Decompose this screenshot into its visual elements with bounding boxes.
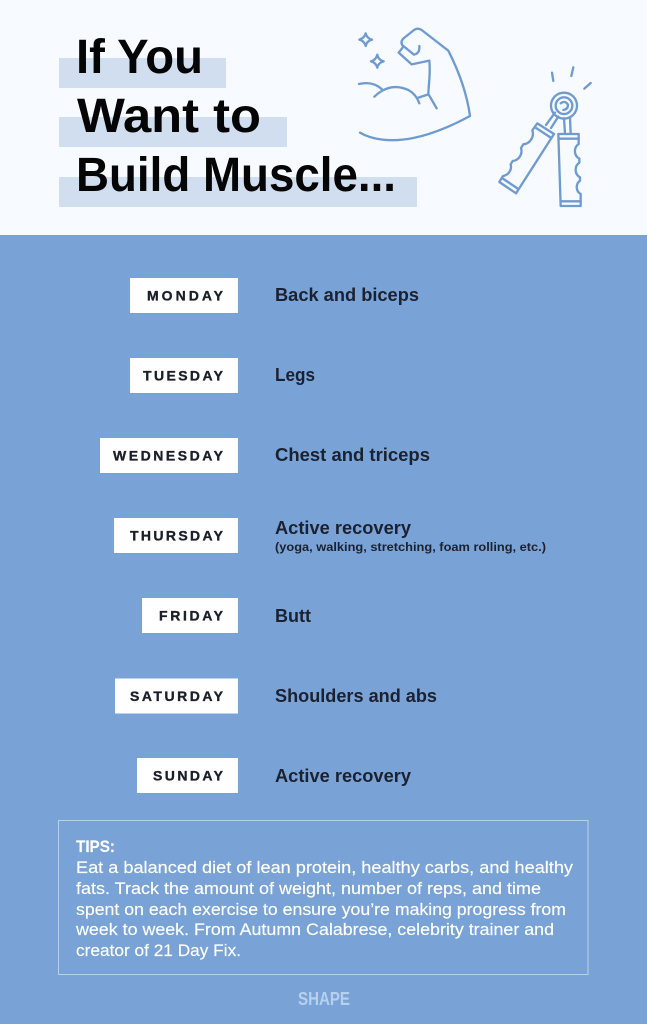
title: If You bbox=[76, 31, 203, 84]
Saturday row: SATURDAY bbox=[130, 688, 224, 704]
callout: tips: spent on each exercise to ensure you’re making progress from bbox=[76, 900, 566, 919]
Saturday row: Shoulders and abs bbox=[275, 685, 437, 706]
icon: flexed bicep bbox=[359, 29, 470, 140]
Friday row: FRIDAY bbox=[159, 608, 224, 624]
title bbox=[59, 31, 417, 207]
Sunday row: Active recovery bbox=[275, 765, 412, 786]
Wednesday row: WEDNESDAY bbox=[113, 448, 224, 464]
Monday row: Back and biceps bbox=[275, 284, 419, 305]
callout: tips: TIPS: bbox=[76, 837, 115, 856]
callout: tips: Eat a balanced diet of lean protein, healthy carbs, and healthy bbox=[76, 858, 574, 877]
title: Want to bbox=[77, 90, 261, 143]
Tuesday row bbox=[130, 358, 315, 393]
Monday row bbox=[130, 278, 419, 313]
callout: tips: week to week. From Autumn Calabrese, celebrity trainer and bbox=[75, 920, 554, 939]
panel: weekly schedule bbox=[0, 235, 647, 1024]
callout: tips: creator of 21 Day Fix. bbox=[76, 941, 241, 960]
title: Build Muscle... bbox=[76, 149, 396, 202]
logo: SHAPE: SHAPE bbox=[298, 989, 350, 1009]
callout: tips: fats. Track the amount of weight, number of reps, and time bbox=[76, 879, 541, 898]
callout: tips bbox=[58, 820, 588, 974]
Thursday row: THURSDAY bbox=[130, 528, 224, 544]
Thursday row bbox=[114, 517, 546, 554]
Wednesday row: Chest and triceps bbox=[275, 444, 430, 465]
Monday row: MONDAY bbox=[147, 288, 224, 304]
Tuesday row: TUESDAY bbox=[143, 368, 224, 384]
panel: header bbox=[0, 0, 647, 235]
icon: hand grip bbox=[499, 67, 591, 206]
Saturday row bbox=[115, 678, 437, 714]
Thursday row: (yoga, walking, stretching, foam rolling, etc.) bbox=[275, 542, 546, 554]
Friday row: Butt bbox=[275, 605, 311, 626]
Sunday row: SUNDAY bbox=[153, 768, 224, 784]
Friday row bbox=[142, 598, 311, 633]
Tuesday row: Legs bbox=[275, 364, 315, 385]
Sunday row bbox=[137, 758, 412, 793]
Wednesday row bbox=[100, 438, 430, 473]
Thursday row: Active recovery bbox=[275, 517, 412, 538]
